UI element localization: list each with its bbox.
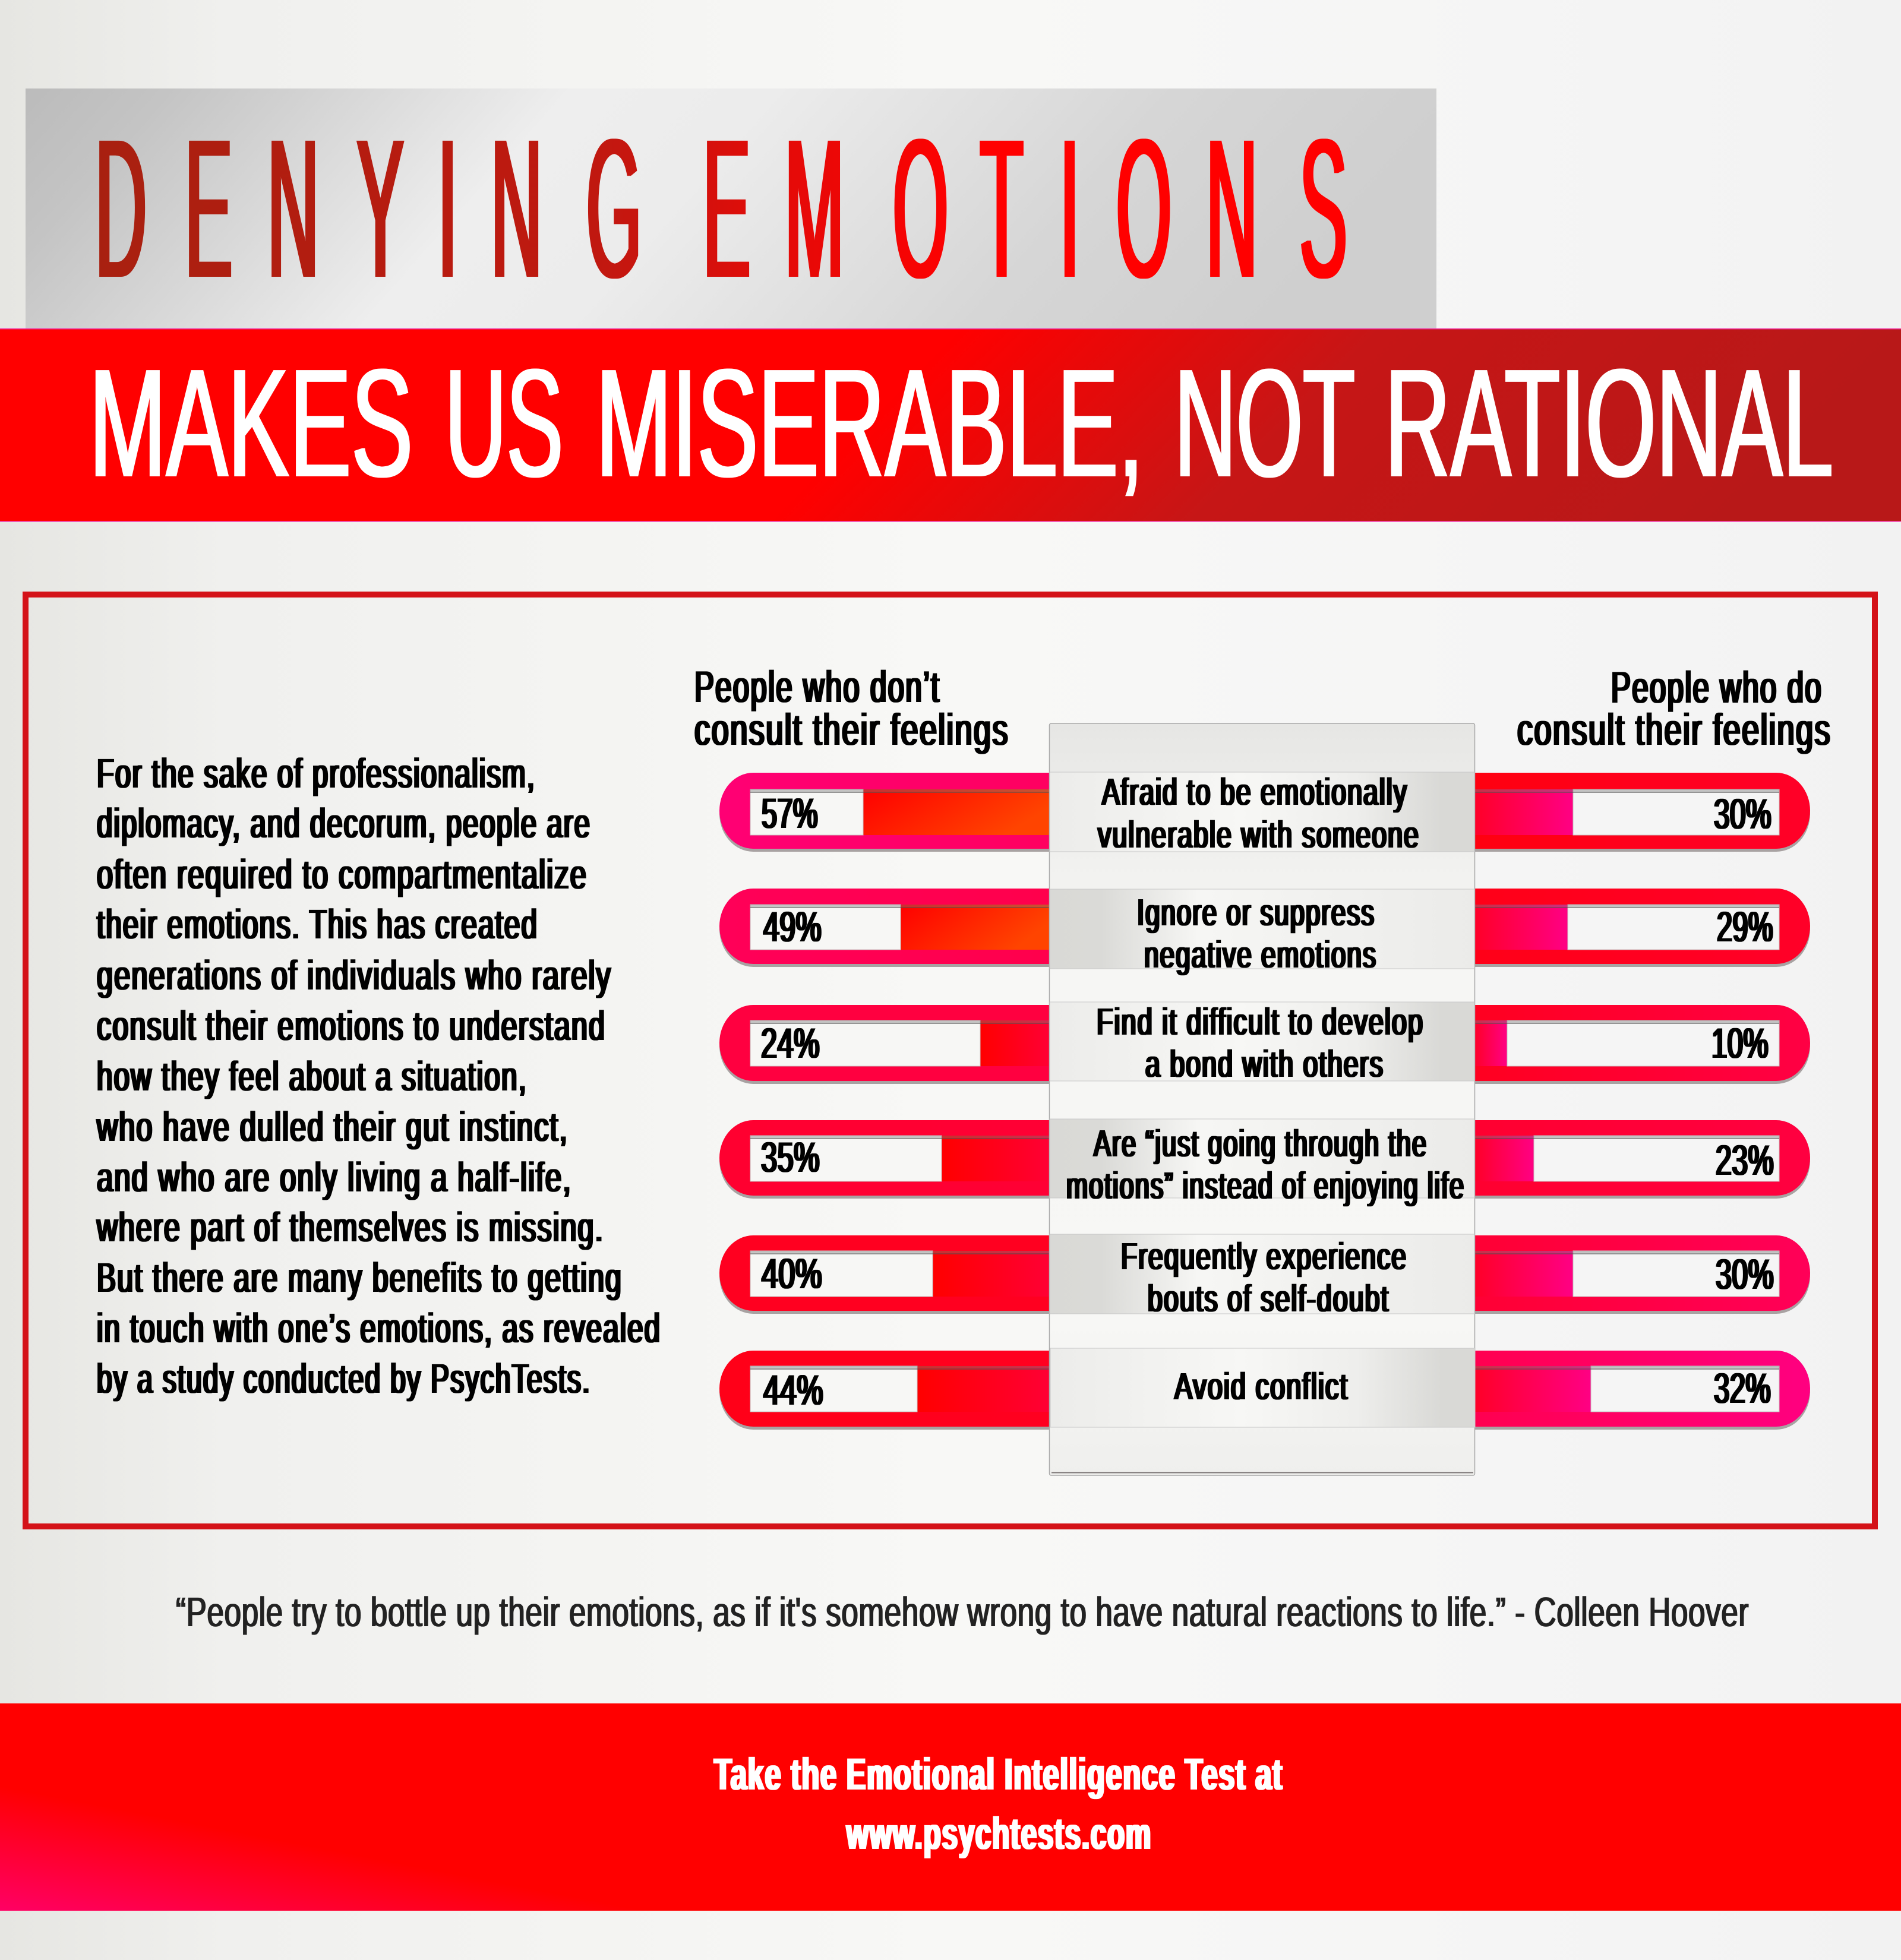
- bar row 2 right: 29%: [1474, 889, 1810, 967]
- statement 1: Afraid to be emotionally: [1102, 770, 1408, 813]
- value 40%: 40%: [762, 1250, 822, 1298]
- intro text block: [96, 750, 661, 1402]
- statement 3: Find it difficult to develop: [1097, 1000, 1424, 1043]
- intro text block: who have dulled their gut instinct,: [96, 1104, 569, 1150]
- statement 2: negative emotions: [1144, 933, 1377, 976]
- bar row 5 right: 30%: [1474, 1235, 1810, 1314]
- statement 2: [1050, 889, 1474, 976]
- value 30%: 30%: [1714, 791, 1771, 838]
- intro text block: how they feel about a situation,: [97, 1053, 528, 1099]
- heading: makes us miserable, not rational: MAKES: [89, 337, 413, 510]
- column heading: people who don't consult: People who don’t: [694, 662, 940, 712]
- statement 3: a bond with others: [1145, 1042, 1384, 1085]
- value 35%: 35%: [761, 1134, 820, 1181]
- footer text: Take the Emotional Intelligence Test at: [714, 1749, 1283, 1800]
- value 24%: 24%: [761, 1020, 820, 1067]
- bar row 4 right: 23%: [1474, 1120, 1810, 1199]
- intro text block: generations of individuals who rarely: [97, 952, 612, 998]
- value 30%: 30%: [1716, 1251, 1774, 1298]
- bar row 5 left: 40%: [719, 1235, 1050, 1314]
- intro text block: consult their emotions to understand: [97, 1003, 606, 1049]
- intro text block: But there are many benefits to getting: [97, 1254, 623, 1301]
- heading: denying emotions: DENYING EMOTIONS: [95, 98, 1347, 319]
- intro text block: For the sake of professionalism,: [97, 750, 536, 796]
- bar row 1 left: 57%: [719, 773, 1050, 852]
- statement 1: vulnerable with someone: [1098, 813, 1420, 856]
- intro text block: their emotions. This has created: [97, 901, 538, 947]
- centre panel with statements: [1049, 723, 1475, 1475]
- value 10%: 10%: [1711, 1020, 1769, 1067]
- bar row 6 right: 32%: [1474, 1351, 1810, 1430]
- intro text block: and who are only living a half-life,: [97, 1154, 572, 1200]
- statement 5: bouts of self-doubt: [1148, 1277, 1390, 1320]
- value 44%: 44%: [763, 1367, 823, 1414]
- column heading: people who don't consult: consult their feelings: [694, 704, 1009, 754]
- column heading: people who do consult: [1517, 662, 1831, 754]
- value 23%: 23%: [1716, 1137, 1774, 1184]
- red banner: makes us miserable, not rational: [0, 328, 1901, 521]
- bar row 1 right: 30%: [1474, 773, 1810, 852]
- statement 2: Ignore or suppress: [1137, 891, 1375, 934]
- footer text: [714, 1749, 1283, 1859]
- footer call to action: [0, 1703, 1901, 1911]
- statement 3: [1050, 1000, 1474, 1085]
- statement 1: [1050, 770, 1474, 856]
- column heading: people who don't consult: [694, 662, 1009, 754]
- statement 6: [1050, 1348, 1475, 1427]
- statement 4: Are “just going through the: [1094, 1122, 1428, 1165]
- value 32%: 32%: [1714, 1365, 1771, 1412]
- heading: makes us miserable, not rational: [89, 337, 1833, 510]
- intro text block: by a study conducted by PsychTests.: [97, 1355, 591, 1402]
- title box: denying emotions: [26, 88, 1436, 328]
- footer text: www.psychtests.com: [846, 1809, 1152, 1859]
- statement 5: Frequently experience: [1121, 1235, 1407, 1278]
- heading: makes us miserable, not rational: MISERABLE,: [596, 337, 1144, 510]
- statement 6: Avoid conflict: [1174, 1365, 1349, 1408]
- bar row 4 left: 35%: [719, 1120, 1050, 1199]
- bar row 6 left: 44%: [719, 1351, 1050, 1430]
- bar row 2 left: 49%: [719, 889, 1050, 967]
- intro text block: where part of themselves is missing.: [96, 1204, 604, 1250]
- statement 4: [1050, 1119, 1474, 1207]
- value 49%: 49%: [763, 903, 822, 951]
- statement 4: motions” instead of enjoying life: [1066, 1164, 1465, 1207]
- value 29%: 29%: [1717, 903, 1773, 951]
- statement 5: [1050, 1234, 1474, 1320]
- intro text block: in touch with one’s emotions, as revealed: [97, 1305, 661, 1351]
- value 57%: 57%: [762, 790, 818, 837]
- intro text block: diplomacy, and decorum, people are: [97, 800, 591, 846]
- red frame panel: [26, 595, 1875, 1526]
- heading: makes us miserable, not rational: NOT: [1174, 337, 1355, 510]
- bar row 3 right: 10%: [1474, 1005, 1810, 1084]
- heading: makes us miserable, not rational: US: [445, 337, 563, 510]
- intro text block: often required to compartmentalize: [97, 851, 588, 897]
- bar row 3 left: 24%: [719, 1005, 1050, 1084]
